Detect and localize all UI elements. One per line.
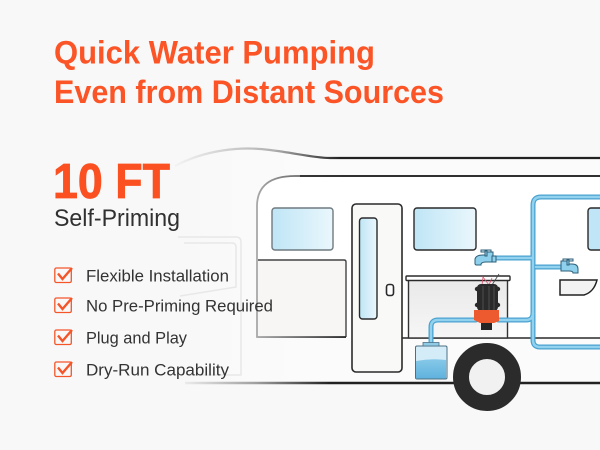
water pipes	[431, 197, 600, 347]
countertop	[406, 276, 510, 280]
water pump	[474, 274, 500, 330]
item: Flexible Installation: Flexible Installation	[86, 268, 229, 286]
rear room	[258, 260, 346, 337]
floor line	[185, 382, 600, 384]
door handle	[386, 284, 394, 296]
tank water	[416, 359, 446, 378]
faucet right	[561, 259, 578, 273]
floor of cabin	[402, 337, 600, 339]
item: Plug and Play: Plug and Play	[86, 330, 188, 348]
tank cap	[423, 342, 439, 346]
kitchen cabinet	[406, 276, 510, 338]
pump motor	[477, 284, 498, 311]
interior fill	[257, 176, 600, 338]
sink	[560, 280, 597, 295]
door window	[360, 218, 377, 319]
rear room base line	[258, 336, 346, 338]
roof outline	[175, 149, 600, 166]
interior top line	[300, 175, 600, 177]
pump head	[474, 310, 499, 323]
RV illustration	[175, 149, 600, 403]
RV body shell	[175, 149, 600, 383]
wheel	[461, 351, 513, 403]
pump ribs	[483, 286, 494, 310]
10 FT headline: 10 FT	[53, 155, 170, 209]
faded rear outline	[178, 237, 241, 375]
water tank	[416, 342, 447, 379]
door	[352, 204, 402, 372]
pump mounts	[475, 287, 500, 307]
window 2	[414, 208, 476, 250]
pump wires	[482, 274, 499, 285]
item: No Pre-Priming Required: No Pre-Priming Required	[86, 298, 273, 316]
item: Dry-Run Capability: Dry-Run Capability	[86, 362, 230, 380]
window 3	[588, 208, 600, 250]
title: Quick Water Pumping	[54, 34, 375, 70]
subheading: Self-Priming	[54, 205, 180, 232]
pump base	[481, 323, 492, 330]
title	[54, 34, 444, 110]
window 1	[272, 208, 333, 250]
title: Even from Distant Sources	[54, 74, 444, 110]
feature list	[55, 268, 273, 380]
faucet left	[475, 250, 496, 265]
interior wall outline	[257, 176, 600, 337]
